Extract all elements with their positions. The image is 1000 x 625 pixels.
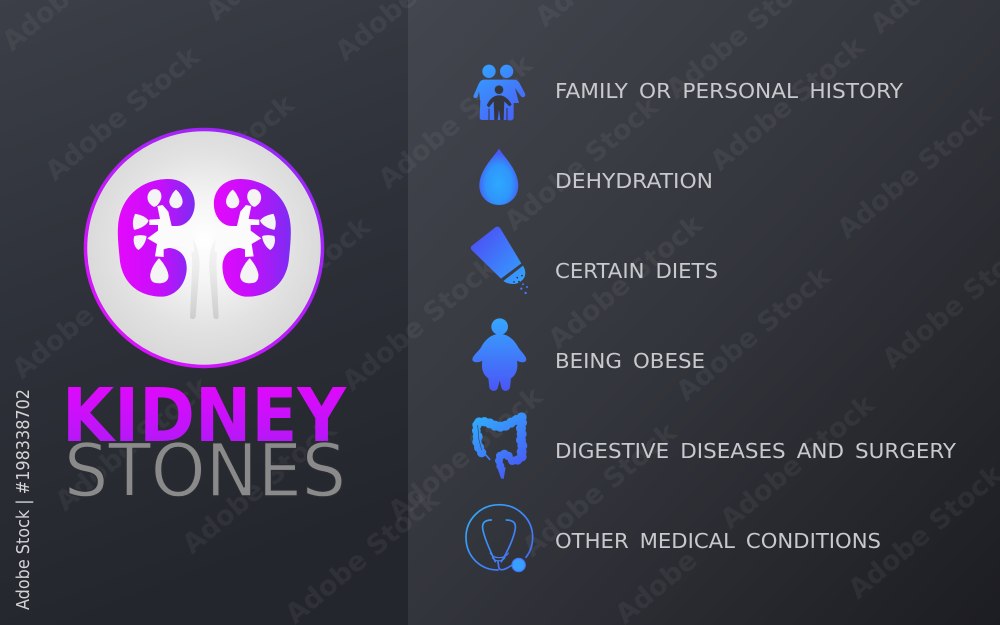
title: STONES: STONES (64, 429, 346, 514)
item: family history: FAMILY OR PERSONAL HISTORY (555, 79, 904, 103)
watermark pattern: Adobe Stock (40, 40, 206, 187)
watermark pattern: Adobe Stock (499, 90, 665, 237)
panel: left background (0, 0, 408, 625)
watermark pattern: Adobe Stock (373, 48, 539, 195)
icon: water drop (479, 149, 518, 205)
icon: intestine (472, 412, 527, 479)
icon: kidneys in circle (86, 130, 322, 366)
watermark pattern: Adobe Stock (383, 380, 549, 527)
item: digestive diseases: DIGESTIVE DISEASES AND SURGERY (555, 439, 957, 463)
renal pelvis left (147, 205, 194, 257)
watermark pattern: Adobe Stock (7, 238, 173, 385)
watermark pattern: Adobe Stock (50, 370, 216, 517)
ureters (183, 228, 225, 319)
item: certain diets: CERTAIN DIETS (555, 259, 718, 283)
left kidney (118, 179, 195, 297)
watermark pattern: Adobe Stock (517, 416, 683, 563)
side credit text: Adobe Stock | #198338702 (13, 389, 34, 610)
item: being obese: BEING OBESE (555, 349, 705, 373)
icon: family (473, 65, 525, 120)
title: KIDNEY: KIDNEY (62, 373, 347, 459)
watermark pattern: Adobe Stock (715, 388, 881, 535)
watermark pattern: Adobe Stock (135, 88, 301, 235)
right kidney (214, 179, 291, 297)
watermark pattern: Adobe Stock (543, 208, 709, 355)
icon: salt shaker (471, 227, 528, 294)
watermark pattern: Adobe Stock (671, 260, 837, 407)
item: other medical conditions: OTHER MEDICAL CONDITIONS (555, 529, 881, 553)
panel: right background (408, 0, 1000, 625)
item: dehydration: DEHYDRATION (555, 169, 713, 193)
watermark pattern: Adobe Stock (337, 250, 503, 397)
icon: stethoscope in ring (466, 505, 533, 572)
watermark pattern: Adobe Stock (211, 210, 377, 357)
watermark pattern: Adobe Stock (177, 413, 343, 560)
watermark pattern: Adobe Stock (832, 98, 998, 245)
watermark pattern: Adobe Stock (705, 30, 871, 177)
renal pelvis right (215, 205, 261, 257)
icon: obese person (472, 318, 526, 391)
